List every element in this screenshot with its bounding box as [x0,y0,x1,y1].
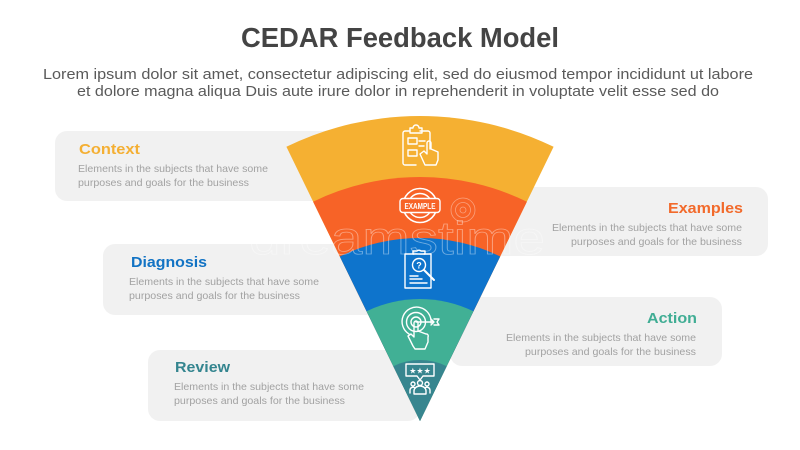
subtitle text: Lorem ipsum dolor sit amet, consectetur adipiscing elit, sed do eiusmod tempor incididunt ut labore [43,66,753,83]
description: review [174,382,364,407]
heading: examples: Examples [668,200,743,217]
segment: review [393,360,447,421]
rating stars: ★★★ [409,366,431,376]
description: examples [552,223,742,248]
panel: review [148,350,420,421]
description: context [78,164,268,189]
icon: star review and people [406,364,434,394]
description: action [506,333,696,358]
stamp label: EXAMPLE [404,202,436,211]
description: examples: purposes and goals for the business [571,237,742,248]
description: diagnosis [129,277,319,302]
subtitle text [43,66,753,100]
funnel chart [286,116,554,421]
description: review: Elements in the subjects that have some [174,382,364,393]
title: CEDAR Feedback Model [241,22,559,53]
segment: examples [313,177,527,421]
description: review: purposes and goals for the business [174,396,345,407]
panel: context [55,131,345,201]
description: examples: Elements in the subjects that have some [552,223,742,234]
description: action: purposes and goals for the business [525,347,696,358]
icon: clipboard with hand [403,125,438,165]
segment: action [367,299,473,421]
watermark [249,198,545,264]
subtitle text: et dolore magna aliqua Duis aute irure dolor in reprehenderit in voluptate velit esse sed do [77,83,719,100]
icon: report with magnifier [405,250,434,288]
panel: action [450,297,722,366]
segment: context [286,116,554,421]
watermark: dreamstime [249,212,545,264]
panel: diagnosis [103,244,393,315]
segment: diagnosis [340,238,500,421]
heading: action: Action [647,310,697,327]
description: action: Elements in the subjects that have some [506,333,696,344]
description: context: purposes and goals for the business [78,178,249,189]
question mark: ? [416,260,422,270]
icon: target with finger [402,307,439,349]
description: diagnosis: purposes and goals for the business [129,291,300,302]
heading: review: Review [175,359,230,376]
panel: examples [490,187,768,256]
heading: context: Context [79,141,140,158]
heading: diagnosis: Diagnosis [131,254,207,271]
icon: example stamp [400,188,440,222]
description: diagnosis: Elements in the subjects that have some [129,277,319,288]
description: context: Elements in the subjects that have some [78,164,268,175]
